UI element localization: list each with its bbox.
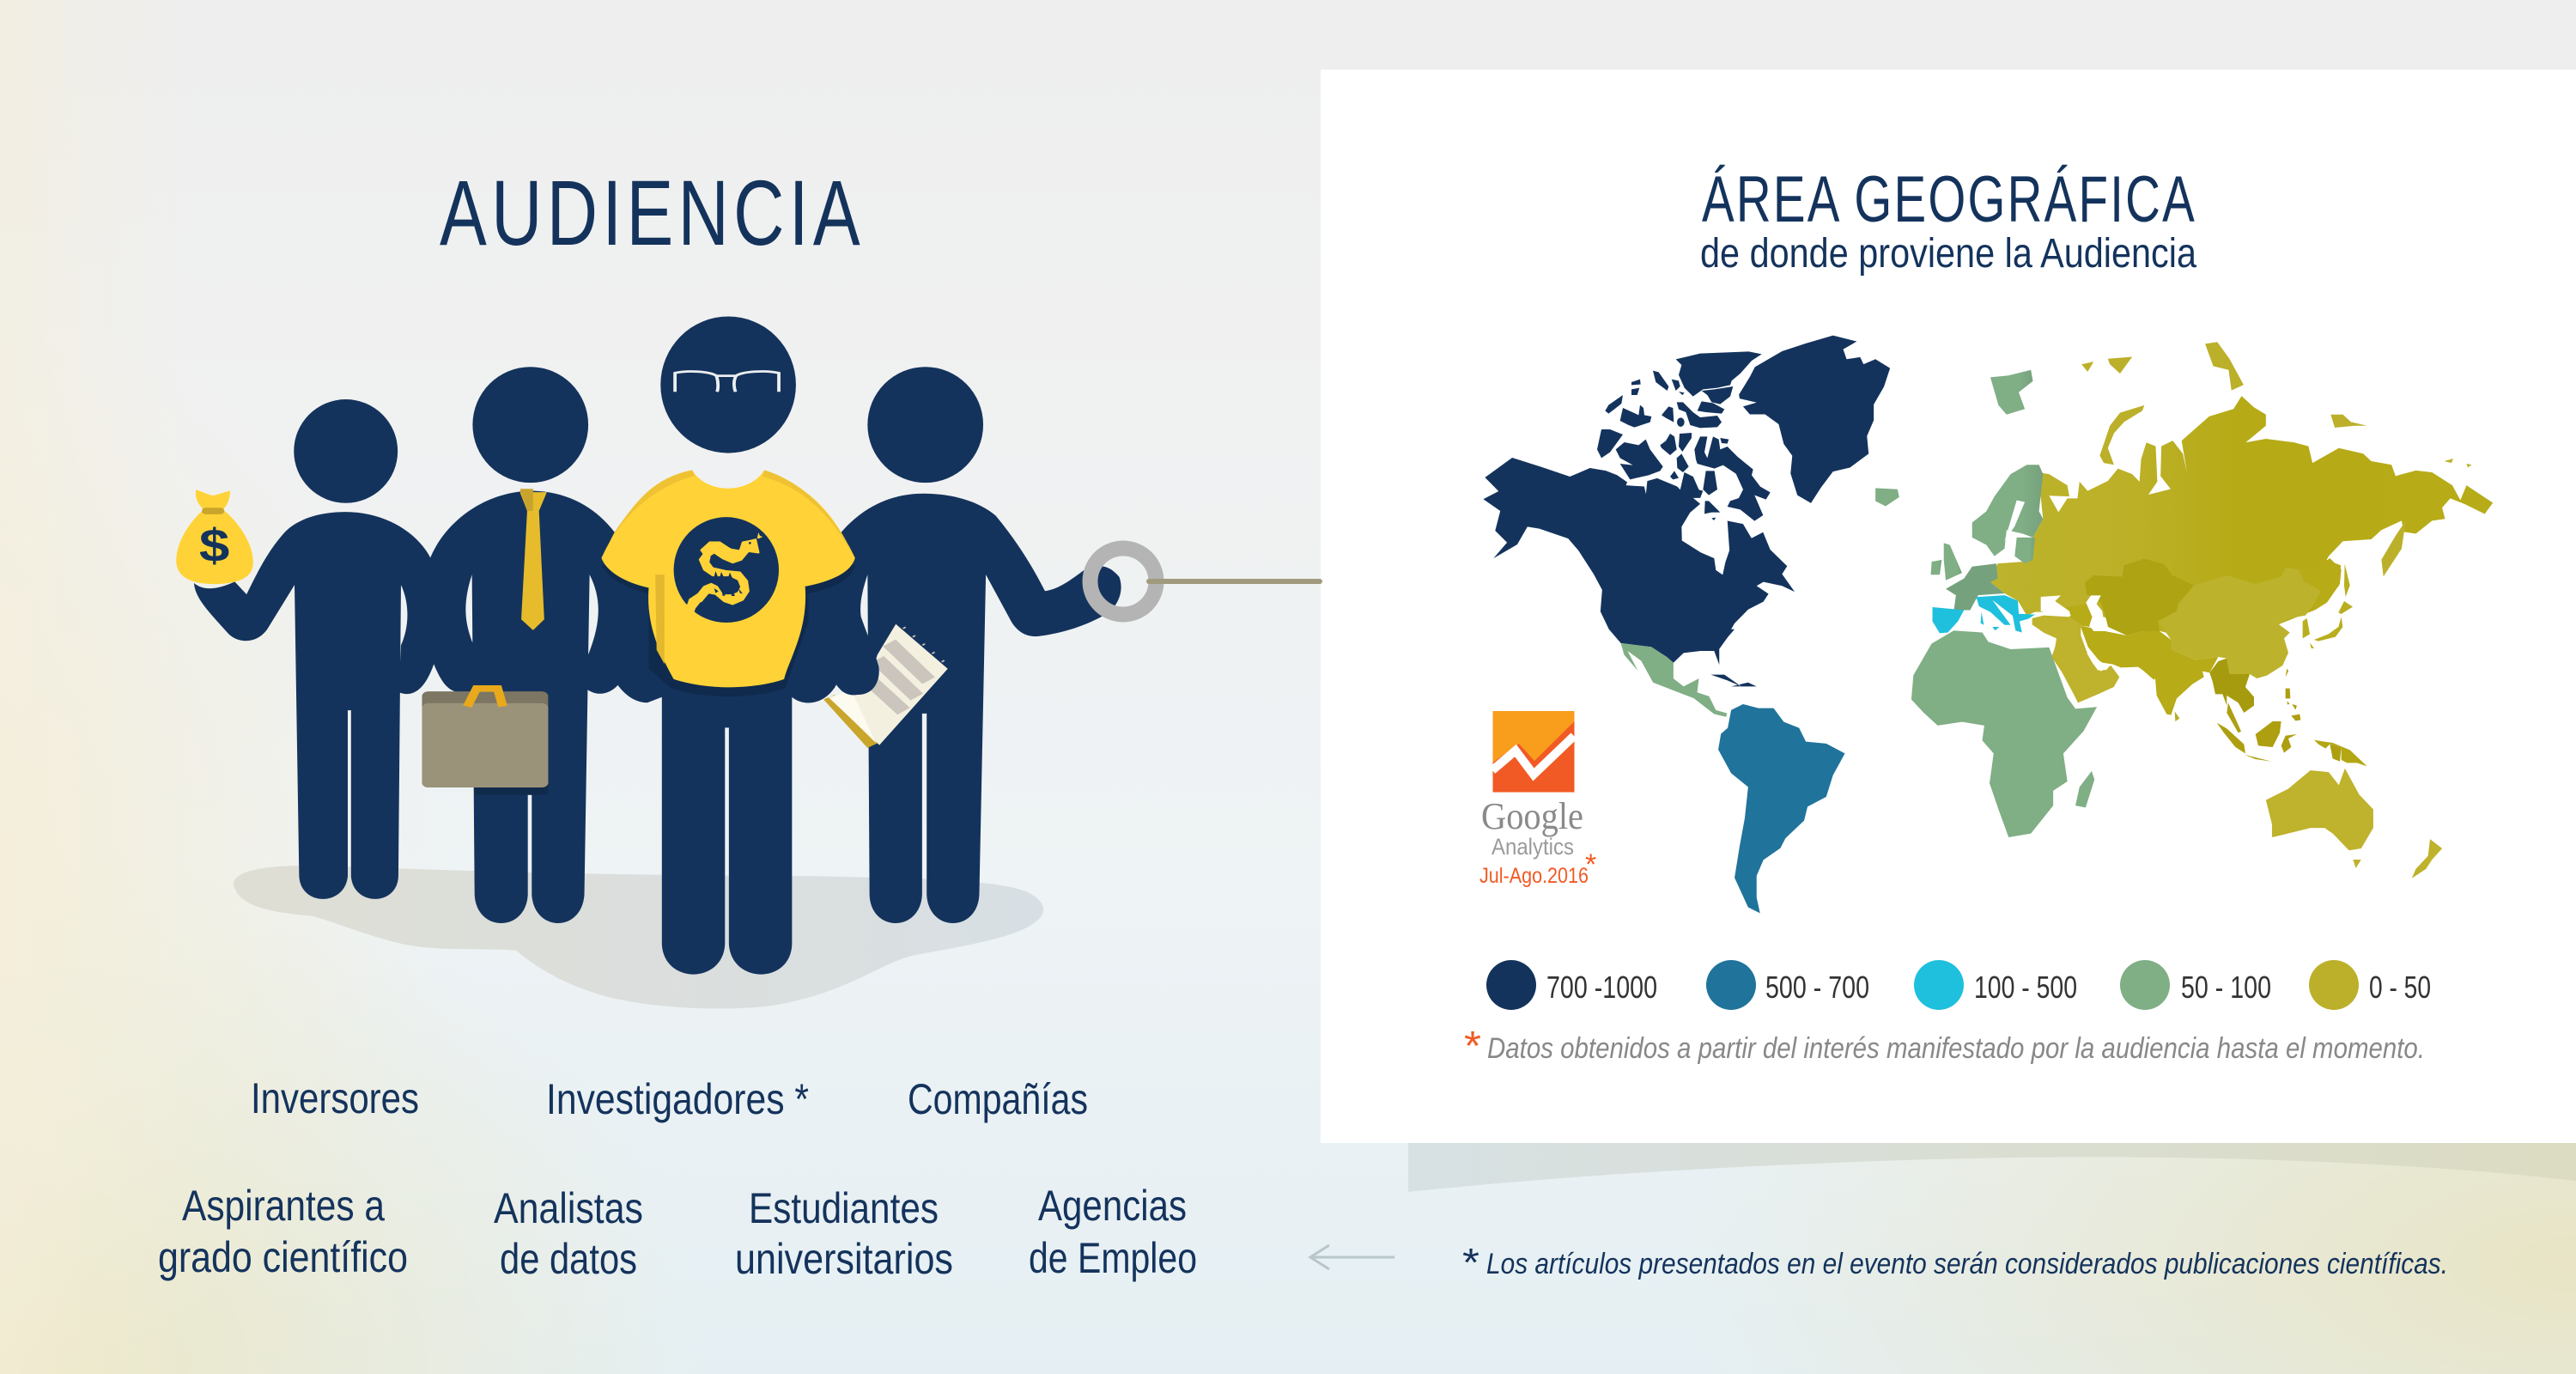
legend item: 700-1000: 700 -1000 [1546,970,1657,1005]
legend item: 0-50: 0 - 50 [2369,970,2431,1005]
label: Estudiantes universitarios [735,1184,953,1283]
map: Turkey and Arabia [2032,616,2119,702]
panel: geographic area background [1321,70,2576,1143]
icon: money bag [176,489,253,584]
label: Agencias de Empleo: Agencias [1038,1182,1187,1230]
figure: student head [660,317,796,453]
label: Compañías: Compañías [908,1075,1088,1123]
map: Kazakhstan region [2085,559,2194,635]
figure: student body [599,570,860,975]
map: Caucasus [2067,604,2093,627]
map: Caribbean islands [1710,675,1757,686]
ground shadow [234,866,1043,1009]
map: Gulf of Bothnia [2004,501,2025,541]
date: Jul-Ago.2016 [1479,864,1589,888]
map: China [2158,568,2321,678]
map: Caspian Sea [2086,595,2105,631]
connector line [1146,579,1322,584]
note: scientific publications: * [1462,1240,1479,1285]
note: scientific publications [1462,1240,2448,1285]
icon: money bag: $ [199,520,229,572]
note: scientific publications: Los artículos presentados en el evento serán considerados publicaciones científicas. [1486,1248,2448,1280]
Google wordmark: Google [1481,795,1583,837]
label: Aspirantes a grado científico [158,1182,408,1281]
label: Aspirantes a grado científico: grado científico [158,1233,408,1281]
title: Audiencia: AUDIENCIA [440,161,865,264]
map: Papua New Guinea [2314,740,2367,766]
figure: executive head [472,367,588,483]
map: Iceland [1875,488,1899,506]
map: North America [1483,458,1795,665]
map: Persian Gulf [2087,653,2111,671]
audience labels [158,1074,1197,1283]
arrow [1310,1245,1394,1269]
legend item: 500-700 [1706,960,1869,1010]
label: Analistas de datos: Analistas [494,1184,643,1232]
map: Indonesia, Malaysia, Philippines [2217,668,2342,762]
figure: executive body [427,490,628,923]
shirt logo: serpent S [678,532,762,618]
tie [520,489,547,630]
map: South-East Asia [2209,659,2254,713]
icon: briefcase [422,689,548,795]
world map [1483,336,2493,913]
label: Agencias de Empleo [1029,1182,1197,1282]
legend item: 0-50 [2309,960,2431,1010]
label: Aspirantes a grado científico: Aspirantes a [182,1182,385,1230]
t-shirt [601,470,855,696]
label: Inversores: Inversores [251,1074,419,1122]
legend item: 100-500 [1914,960,2077,1010]
glasses [675,371,779,392]
map: Spain and Italy [1932,595,2035,633]
asterisk: * [1585,848,1596,881]
map: Black Sea [2041,595,2071,617]
map: Australia and New Zealand [2266,769,2442,879]
data footnote: Datos obtenidos a partir del interés manifestado por la audiencia hasta el momento. [1487,1032,2425,1065]
map: Asia detail [2032,558,2367,766]
label: Estudiantes universitarios: Estudiantes [749,1184,939,1232]
label: Analistas de datos [494,1184,643,1283]
icon: ring [1091,548,1156,615]
legend [1486,960,2431,1010]
figure: analyst head [867,367,983,483]
label: Agencias de Empleo: de Empleo [1029,1234,1197,1282]
label: Analistas de datos: de datos [500,1235,637,1283]
map: Arctic Canada islands [1597,351,1771,521]
map: Greenland [1739,336,1890,503]
legend item: 500-700: 500 - 700 [1765,970,1869,1005]
map: Korea, Japan, Sakhalin, Sri Lanka [2175,564,2353,721]
map: Manchuria coast [2299,558,2342,610]
label: Estudiantes universitarios: universitarios [735,1235,953,1283]
panel shadow band [1408,1143,2576,1192]
logo: Google Analytics [1479,711,1596,888]
data footnote: * [1464,1024,1481,1069]
map: France and Germany [1946,563,2004,610]
figure: investor head [294,399,398,503]
heading: Área geográfica: ÁREA GEOGRÁFICA [1702,163,2196,236]
data footnote [1464,1024,2425,1069]
Analytics wordmark: Analytics [1492,834,1574,860]
map: South America [1718,704,1845,913]
logo mark [1492,711,1575,792]
map: Arctic islands of Russia [2081,342,2472,576]
legend item: 50-100: 50 - 100 [2181,970,2271,1005]
figure: investor body [194,512,435,899]
legend item: 100-500: 100 - 500 [1974,970,2077,1005]
icon: notebook [823,617,948,748]
figure: analyst body [829,494,1121,923]
label: Investigadores: Investigadores * [546,1075,809,1123]
map: Africa [1911,630,2097,837]
legend item: 50-100 [2120,960,2271,1010]
illustration: four audience figures [176,317,1157,1009]
map: Russia and Eastern Europe [1990,396,2493,635]
map: Scandinavia, Baltics, UK, Svalbard [1931,370,2043,581]
map: Central America [1621,643,1727,717]
subheading: de donde proviene la Audiencia [1700,231,2196,277]
map: South Asia and Iran [2081,625,2218,715]
legend item: 700-1000 [1486,960,1657,1010]
